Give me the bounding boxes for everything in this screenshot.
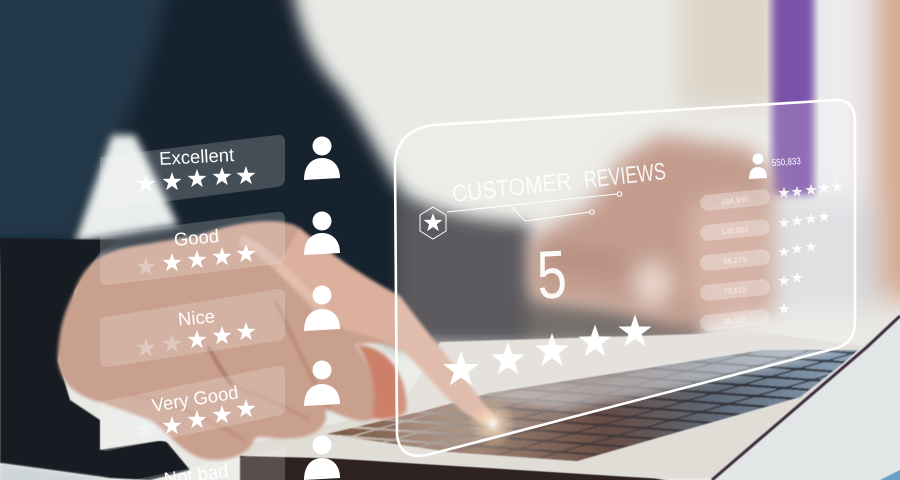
five large stars [443, 314, 652, 385]
review count bars: 73,615 [723, 285, 747, 296]
soft haze over rear keys [470, 345, 860, 410]
icon: star badge with connector lines [420, 192, 622, 239]
small star rows [778, 181, 843, 314]
fingertip glow [469, 400, 517, 448]
icon: person 1 [304, 136, 340, 180]
white wedge behind the wrist [75, 135, 178, 242]
heading: customer reviews: REVIEWS [583, 158, 667, 194]
desk under the hand [0, 464, 110, 480]
icon: person 3 [304, 286, 340, 331]
panel: Very Good: Very Good [150, 381, 240, 416]
heading: customer reviews: CUSTOMER [451, 168, 573, 208]
panel: Excellent: Excellent [159, 144, 235, 169]
laptop front edge [240, 455, 720, 480]
left rating list [100, 135, 340, 480]
panel: Excellent [100, 135, 285, 209]
panel: Not bad [100, 448, 285, 480]
icon: person 2 [304, 212, 340, 255]
review count bars: 49,132 [723, 315, 747, 326]
review count bars [699, 188, 771, 332]
review count bars: 146,824 [721, 225, 749, 236]
icon: person 5 [304, 436, 340, 480]
panel: Good: Good [173, 225, 220, 250]
panel: Nice: Nice [177, 305, 216, 330]
laptop keyboard [327, 350, 860, 461]
icon: person 4 [304, 360, 340, 406]
panel: customer reviews frame [395, 100, 855, 456]
laptop palm rest [240, 332, 867, 478]
panel: Very Good [100, 366, 285, 451]
review count bars: 96,273 [723, 255, 747, 266]
blurred far hand [530, 135, 773, 330]
laptop lid base right [712, 312, 900, 480]
heading: customer reviews [451, 158, 667, 208]
paper under the hand [112, 410, 240, 455]
panel: Good [100, 212, 285, 285]
jacket [0, 0, 535, 345]
sleeve cuff [0, 238, 190, 480]
panel: Nice [100, 289, 285, 367]
review count bars: 184,935 [721, 195, 749, 206]
hand and fingers [58, 221, 497, 460]
rating number: 5 [535, 236, 568, 313]
icon: small person with total count: 550,833 [771, 156, 801, 169]
icon: small person with total count [749, 154, 801, 179]
